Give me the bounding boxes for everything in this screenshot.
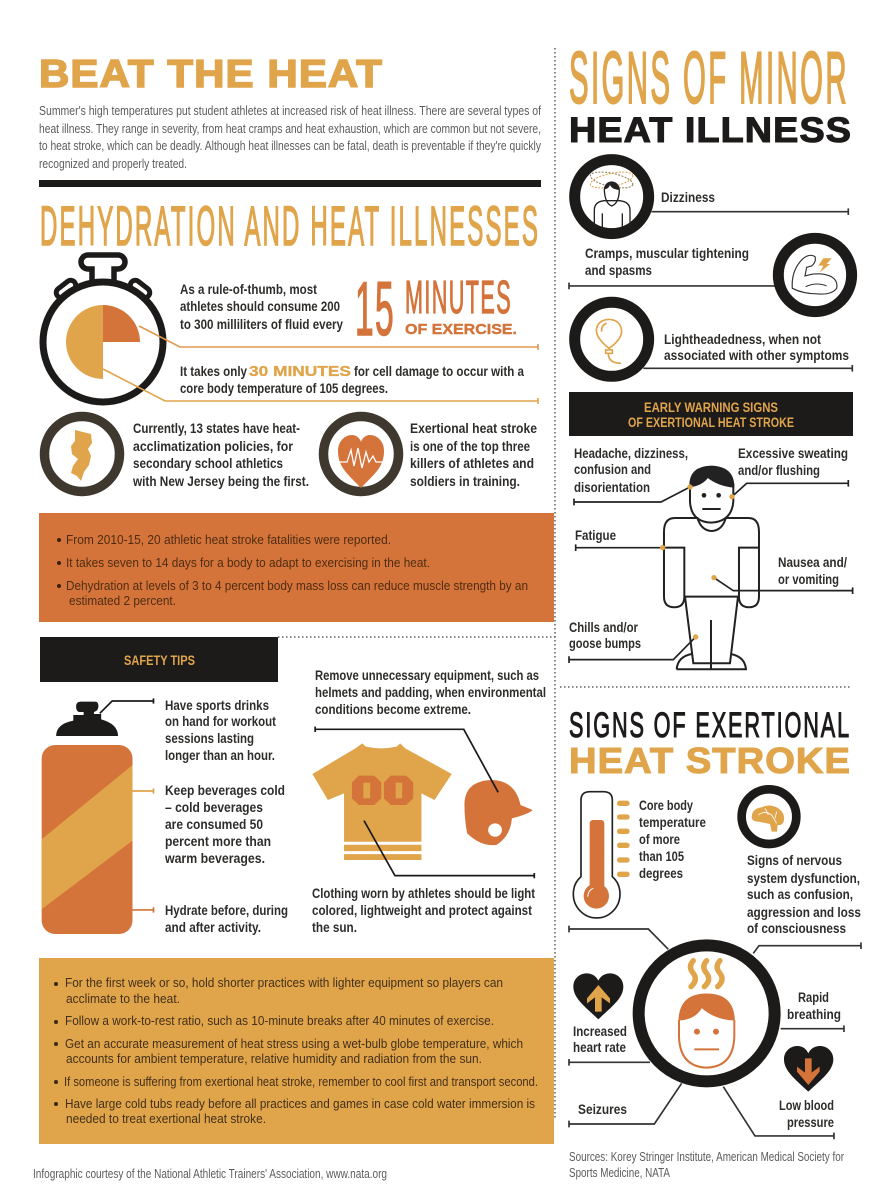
panel: yellow prevention tips: acclimate to the heat.: [66, 991, 180, 1006]
text: 30 minutes cell damage: 30 MINUTES: [249, 364, 351, 380]
label: sweating: [738, 446, 848, 478]
label: nervous system: system dysfunction,: [747, 871, 860, 886]
label: nervous system: such as confusion,: [747, 887, 853, 902]
text: sports drinks: [165, 698, 276, 763]
icon: balloon ring: [575, 302, 852, 376]
text: sports drinks: on hand for workout: [165, 714, 276, 729]
label: core body temperature: temperature: [639, 815, 706, 830]
text: remove equipment: conditions become extreme.: [315, 702, 471, 717]
panel heading: safety tips: [40, 637, 278, 682]
text: top three killers: Exertional heat stroke: [410, 421, 537, 436]
text: top three killers: [410, 421, 537, 489]
text: acclimatization policies: Currently, 13 states have heat-: [133, 421, 300, 436]
text: acclimatization policies: with New Jersey being the first.: [132, 474, 309, 489]
heading: signs of exertional heat stroke: [569, 706, 851, 781]
diagram: body figure with callouts: [569, 467, 853, 669]
label: headache: disorientation: [574, 480, 650, 495]
text: fluid rule of thumb: [180, 282, 343, 332]
label: lightheadedness: Lightheadedness, when not: [664, 332, 821, 347]
text: remove equipment: helmets and padding, when environmental: [315, 685, 546, 700]
label: increased heart rate: Increased: [573, 1024, 627, 1039]
label: headache: Headache, dizziness,: [574, 446, 688, 461]
label: cramps: [585, 246, 749, 278]
label: headache: confusion and: [574, 462, 651, 477]
icon: muscle ring: [569, 238, 852, 312]
label: nervous system: aggression and loss: [747, 905, 861, 920]
text: acclimatization policies: secondary school athletics: [133, 456, 283, 471]
label: increased heart rate: heart rate: [573, 1040, 626, 1055]
label: rapid breathing: breathing: [787, 1007, 841, 1022]
label: seizures: Seizures: [578, 1102, 627, 1117]
label: nausea: Nausea and/: [778, 555, 847, 570]
label: sweating: Excessive sweating: [738, 446, 848, 461]
label: chills: goose bumps: [569, 636, 641, 651]
label: lightheadedness: [664, 332, 849, 363]
title: Beat the Heat: BEAT THE HEAT: [39, 53, 383, 96]
text: fluid rule of thumb: As a rule-of-thumb, most: [180, 282, 317, 297]
text: sports drinks: sessions lasting: [165, 731, 254, 746]
sources: [569, 1150, 844, 1180]
footer credit: Infographic courtesy of the National Athletic Trainers' Association, www.nata.org: [33, 1167, 387, 1181]
panel: yellow prevention tips: Get an accurate measurement of heat stress using a wet-bulb globe temperature, which: [65, 1036, 523, 1051]
panel: yellow prevention tips: [39, 958, 554, 1144]
label: cramps: Cramps, muscular tightening: [585, 246, 749, 261]
label: nervous system: [747, 853, 861, 936]
text: keep beverages cold: – cold beverages: [165, 800, 263, 815]
panel: orange facts: It takes seven to 14 days for a body to adapt to exercising in the heat.: [66, 555, 430, 570]
black divider bar: [39, 180, 541, 187]
panel: yellow prevention tips: accounts for ambient temperature, relative humidity and radiation from the sun.: [66, 1051, 482, 1066]
text: hydrate: Hydrate before, during: [165, 903, 288, 918]
pointer line: 15 minutes: [139, 326, 538, 350]
intro text block: heat illness. They range in severity, from heat cramps and heat exhaustion, which are common but not severe,: [39, 122, 541, 136]
panel: orange facts: [39, 513, 554, 622]
text: remove equipment: Remove unnecessary equipment, such as: [315, 668, 539, 683]
icon: stopwatch with pie: [43, 255, 163, 402]
label: core body temperature: degrees: [639, 866, 683, 881]
text: 30 minutes cell damage: core body temperature of 105 degrees.: [180, 381, 388, 396]
panel: orange facts: estimated 2 percent.: [69, 593, 176, 608]
label: rapid breathing: Rapid: [798, 990, 829, 1005]
text: keep beverages cold: percent more than: [165, 834, 271, 849]
text: sports drinks: longer than an hour.: [165, 748, 275, 763]
label: nausea: or vomiting: [778, 572, 839, 587]
heading bar: early warning signs: OF EXERTIONAL HEAT STROKE: [628, 415, 794, 430]
text: 30 minutes cell damage: [180, 364, 524, 396]
label: core body temperature: than 105: [639, 849, 684, 864]
pointer line: 30 minutes: [103, 369, 538, 404]
label: fatigue: Fatigue: [575, 528, 616, 543]
heading: signs of exertional heat stroke: HEAT STROKE: [569, 740, 851, 781]
text: clothing: [312, 886, 535, 935]
heading: signs of minor heat illness: HEAT ILLNESS: [569, 111, 852, 150]
label: core body temperature: [639, 798, 706, 881]
text: MINUTES: [405, 271, 512, 323]
heading: signs of minor heat illness: [569, 38, 852, 150]
text: top three killers: is one of the top three: [410, 439, 530, 454]
intro text block: Summer's high temperatures put student athletes at increased risk of heat illness. There are several types of: [39, 104, 541, 118]
label: low blood pressure: [779, 1098, 834, 1130]
text: fluid rule of thumb: to 300 milliliters of fluid every: [180, 317, 343, 332]
text: 30 minutes cell damage: for cell damage to occur with a: [354, 364, 524, 379]
text: top three killers: soldiers in training.: [410, 474, 520, 489]
label: chills: Chills and/or: [569, 620, 639, 635]
text: fluid rule of thumb: athletes should consume 200: [180, 299, 340, 314]
panel heading: safety tips: SAFETY TIPS: [124, 653, 195, 668]
text: sports drinks: Have sports drinks: [165, 698, 269, 713]
panel: yellow prevention tips: needed to treat exertional heat stroke.: [66, 1111, 266, 1126]
icon: New Jersey in ring: [44, 416, 120, 492]
text: keep beverages cold: warm beverages.: [164, 851, 265, 866]
icon: heart with up arrow: [573, 973, 623, 1019]
sources: Sports Medicine, NATA: [569, 1166, 671, 1180]
label: core body temperature: of more: [639, 832, 680, 847]
label: chills: [569, 620, 641, 651]
label: core body temperature: Core body: [639, 798, 693, 813]
icon: sports bottle: [42, 698, 153, 934]
label: rapid breathing: [787, 990, 841, 1022]
big stat: 15 minutes of exercise: OF EXERCISE.: [405, 321, 517, 338]
label: lightheadedness: associated with other symptoms: [664, 348, 849, 363]
label: nervous system: of consciousness: [747, 921, 846, 936]
text: clothing: the sun.: [312, 920, 357, 935]
label: low blood pressure: Low blood: [779, 1098, 834, 1113]
heading bar: early warning signs: [569, 392, 853, 436]
label: cramps: and spasms: [585, 263, 652, 278]
icon: dizziness ring: [575, 160, 848, 234]
text: keep beverages cold: Keep beverages cold: [165, 783, 285, 798]
panel: yellow prevention tips: If someone is suffering from exertional heat stroke, remember to cool first and transport second.: [64, 1074, 538, 1089]
icon: brain ring: [742, 789, 796, 844]
panel: yellow prevention tips: Have large cold tubs ready before all practices and games in case cold water immersion is: [65, 1096, 535, 1111]
diagram: overheated face ring with callouts: [569, 926, 861, 1139]
label: nervous system: Signs of nervous: [747, 853, 842, 868]
label: sweating: and/or flushing: [738, 463, 820, 478]
text: top three killers: killers of athletes and: [410, 456, 534, 471]
text: hydrate: and after activity.: [165, 920, 261, 935]
label: headache: [574, 446, 688, 495]
panel: orange facts: From 2010-15, 20 athletic heat stroke fatalities were reported.: [66, 532, 391, 547]
label: increased heart rate: [573, 1024, 627, 1055]
icon: heart with pulse in ring: [324, 416, 398, 492]
text: remove equipment: [315, 668, 546, 717]
text: keep beverages cold: [164, 783, 285, 866]
big stat: 15 minutes of exercise: [355, 267, 517, 352]
text: 30 minutes cell damage: It takes only: [180, 364, 247, 379]
panel: yellow prevention tips: For the first week or so, hold shorter practices with lighter equipment so players can: [65, 975, 503, 990]
label: dizziness: Dizziness: [661, 190, 715, 205]
heading bar: early warning signs: EARLY WARNING SIGNS: [644, 400, 778, 415]
panel: yellow prevention tips: Follow a work-to-rest ratio, such as 10-minute breaks after 40 minutes of exercise.: [65, 1013, 494, 1028]
label: nausea: [778, 555, 847, 587]
intro text block: to heat stroke, which can be deadly. Although heat illnesses can be fatal, death is preventable if they're quickly: [39, 139, 542, 153]
text: clothing: colored, lightweight and protect against: [312, 903, 532, 918]
text: acclimatization policies: acclimatization policies, for: [133, 439, 294, 454]
big stat: 15 minutes of exercise: 15: [355, 267, 395, 352]
text: keep beverages cold: are consumed 50: [165, 817, 263, 832]
panel: orange facts: Dehydration at levels of 3 to 4 percent body mass loss can reduce muscle strength by an: [66, 578, 528, 593]
text: clothing: Clothing worn by athletes should be light: [312, 886, 535, 901]
intro text block: [39, 104, 542, 171]
icon: thermometer: [573, 792, 630, 918]
intro text block: recognized and properly treated.: [39, 157, 187, 171]
text: hydrate: [165, 903, 288, 935]
label: low blood pressure: pressure: [787, 1115, 834, 1130]
icon: jersey and helmet: [312, 727, 534, 878]
icon: heart with down arrow: [784, 1046, 833, 1092]
text: acclimatization policies: [132, 421, 309, 489]
